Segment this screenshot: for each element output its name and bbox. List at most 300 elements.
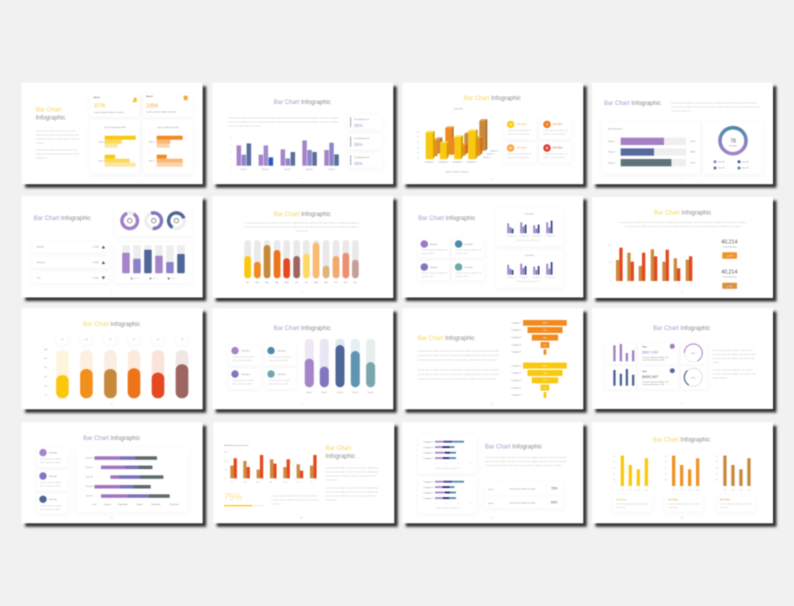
card: item 1: 377K	[94, 104, 106, 110]
slide 10: cards and capsules	[212, 308, 397, 413]
stat card: purple	[638, 343, 678, 365]
card 2	[37, 470, 68, 491]
page number: 8	[681, 291, 683, 294]
card: yellow option: amet consectetur	[507, 133, 530, 136]
gantt chart panel: Task 05	[86, 495, 93, 497]
page number: 7	[492, 291, 494, 293]
chart: brown: Q2	[732, 489, 735, 491]
card 1: Lorem ipsum dolor	[232, 356, 255, 358]
3D column chart: 3	[417, 148, 419, 150]
pill bar chart: Sep	[324, 282, 329, 284]
pill bar chart: Mar	[265, 282, 269, 284]
row: monthly: 12,345	[93, 246, 100, 248]
title: Bar Chart Infographic	[274, 100, 331, 106]
description text: Lorem	[326, 499, 337, 501]
3D column chart	[417, 108, 499, 174]
pill bar chart: Nov	[344, 282, 348, 284]
description text: Lorem ipsum dolor sit amet	[228, 125, 261, 128]
description text: Lorem ipsum dolor sit amet consectetur adipiscing elit sed do	[418, 358, 497, 361]
note text	[272, 495, 319, 505]
page number: 6	[302, 291, 304, 294]
panel: donut 78: Item 04	[742, 167, 750, 170]
stat card: purple: consectetur elit	[642, 358, 665, 362]
chart: bottom: Category 1	[423, 497, 434, 500]
slide 13: gantt	[22, 422, 206, 527]
axis labels: 60	[45, 367, 48, 369]
capsule: orange	[80, 333, 93, 398]
chart: top: Category 2	[423, 451, 434, 454]
stat card: navy: Text	[642, 370, 647, 373]
card 2: sit amet elit	[268, 359, 289, 362]
column chart: May	[283, 481, 287, 483]
card 3	[37, 494, 68, 514]
capsule chart	[305, 339, 375, 394]
card: orange: Lorem	[668, 507, 678, 509]
description text	[245, 222, 360, 232]
capsule: brown: 07	[109, 339, 112, 341]
card 1	[229, 345, 260, 366]
chart: yellow: 50	[613, 467, 616, 469]
pill bar chart: May	[285, 282, 288, 284]
slide 1: costs comparison	[22, 83, 206, 188]
card: orange: Lorem ipsum dolor sit amet	[668, 503, 701, 506]
column chart: 0	[225, 478, 227, 480]
pill bar chart: Jul	[305, 282, 308, 284]
stat: first total: Current Earning	[722, 246, 736, 248]
card 3: sit amet elit	[232, 382, 253, 385]
funnel: yellow: Category 3	[511, 379, 522, 382]
pill bar chart: Feb	[256, 282, 260, 284]
gantt chart panel: Task 03	[86, 476, 93, 478]
capsule chart: Data 2	[321, 391, 328, 394]
page number: 2	[302, 179, 304, 181]
panel: best performers bars: Player 1	[608, 141, 616, 143]
column chart: 100	[224, 469, 228, 471]
chart: bottom	[418, 477, 477, 513]
panel: donut 78: 78	[730, 139, 736, 145]
chart: orange: 30	[664, 473, 668, 475]
chart: top: 4	[458, 463, 460, 465]
chart: brown: 50	[716, 467, 719, 469]
card: yellow option: Text Here	[516, 123, 527, 126]
chart: top	[418, 435, 477, 473]
row: semester: 12,345	[93, 262, 100, 264]
column chart: 4	[230, 152, 232, 154]
description text: Lorem ipsum dolor sit amet consectetur adipiscing elit sed do eiusmod	[418, 369, 499, 372]
description text	[619, 221, 748, 228]
page number: 12	[681, 403, 684, 405]
panel: donut 78	[703, 122, 762, 174]
row: monthly	[32, 241, 108, 252]
ring: 30%: 30%	[691, 377, 696, 379]
stat: second total: 40,214	[721, 270, 737, 276]
funnel: orange: 25%	[543, 345, 547, 347]
card: brown: Text Here	[720, 498, 731, 501]
column chart: 6	[230, 138, 232, 140]
column chart: 100	[608, 262, 612, 264]
chart: top: Series 1 Series 2 Series 3	[516, 240, 540, 242]
card: monthly: Lorem ipsum dolor sit	[421, 248, 448, 252]
column chart	[230, 138, 339, 173]
page number: 4	[681, 179, 683, 181]
row: monthly: Monthly	[37, 246, 44, 248]
funnel: orange: 50%	[543, 337, 547, 339]
panel: donut 78: Item 01	[718, 160, 726, 164]
chart: yellow: 90	[613, 456, 616, 458]
note text: Lorem ipsum dolor sit amet consectetur	[272, 495, 318, 498]
funnel: orange: 75%	[543, 330, 547, 332]
description text: Lorem ipsum dolor sit amet elit	[713, 357, 755, 360]
title: Bar Chart Infographic	[274, 212, 331, 218]
row: semester: Semester	[37, 261, 46, 264]
gantt chart panel: September	[118, 503, 128, 506]
capsule: red: 01	[157, 339, 160, 341]
column chart: 0	[610, 280, 612, 282]
row: year	[32, 272, 108, 283]
card 1: sit amet elit	[232, 359, 253, 362]
description text: Lorem ipsum dolor sit amet consectetur adipiscing	[326, 490, 378, 493]
chart: yellow horizontal bars	[90, 120, 140, 174]
funnel: orange: Category 4	[511, 343, 522, 346]
capsule: dark orange	[128, 333, 140, 398]
panel: donut 78: Item 02	[742, 160, 750, 164]
stat card: navy: $450,097	[642, 375, 658, 379]
axis labels: 80	[45, 358, 48, 360]
funnel: yellow: Category 5	[511, 393, 522, 396]
slide 9: capsule bars	[22, 308, 206, 413]
chart: yellow horizontal bars: Item 2	[99, 160, 105, 163]
title: Bar Chart Infographic	[485, 444, 542, 450]
description text: Lorem ipsum dolor sit amet consectetur adipiscing elit sed do eiusmod	[485, 460, 566, 463]
3D column chart: 6	[417, 132, 419, 134]
data card 1: 55%	[354, 123, 363, 128]
chart: bottom: Category 4	[423, 480, 434, 483]
page number: 14	[300, 516, 303, 519]
title: Bar Chart Infographic	[34, 216, 91, 222]
chart: bottom: Series 1 Series 2 Series 3	[436, 507, 460, 509]
funnel: orange	[511, 320, 567, 355]
column chart: Jun-15	[284, 169, 291, 171]
description text: Lorem ipsum dolor sit amet	[713, 349, 753, 352]
card: item 2	[143, 94, 193, 117]
chart: brown: Q1	[724, 489, 727, 491]
3D column chart: Category 3	[452, 161, 463, 164]
axis labels: 0	[45, 394, 47, 396]
row: item 1: 75%	[551, 487, 558, 491]
title: Bar Chart Infographic	[604, 101, 661, 107]
card: yellow: Lorem	[616, 507, 626, 509]
chart: yellow: Q2	[629, 489, 633, 491]
card 2: Lorem ipsum dolor	[40, 482, 62, 484]
stat: first total: ▲ 40%	[726, 254, 733, 258]
stat card: navy: consectetur elit	[642, 383, 665, 386]
description text: Lorem ipsum dolor sit amet consectetur adipiscing elit sed do eiusmod tempor incididunt ut labore et dolore	[228, 117, 339, 120]
card: red option	[540, 142, 572, 162]
data card 2: Data Analysis 02	[354, 137, 370, 140]
stat card: navy	[638, 366, 678, 389]
panel: column chart with tracks: Item 3	[171, 277, 177, 280]
column chart: Jul	[310, 481, 313, 483]
data card 3	[348, 153, 382, 168]
panel: best performers bars	[602, 122, 700, 174]
axis labels	[44, 349, 48, 396]
chart: bottom: Category 3	[532, 276, 543, 279]
gantt chart panel: November	[151, 504, 161, 506]
column chart	[608, 245, 692, 282]
page number: 16	[681, 516, 684, 519]
column chart: Mar-15	[262, 169, 269, 171]
chart: brown: 10	[716, 479, 719, 481]
page number: 9	[111, 402, 113, 405]
3D column chart: 1	[417, 158, 419, 160]
chart: orange horizontal bars: Item 2	[149, 160, 155, 163]
card 3: sit amet elit	[40, 508, 61, 511]
card: text here teal: amet elit	[455, 252, 468, 255]
ring: 65%: 65%	[691, 353, 696, 355]
title	[326, 446, 355, 460]
description text: Lorem ipsum dolor sit amet consectetur adipiscing elit sed do eiusmod tempor incididunt ut labore	[625, 225, 742, 228]
funnel: orange: Category 2	[511, 328, 522, 331]
card: orange: Text Here	[668, 498, 679, 501]
card 3: Title Here	[49, 498, 58, 501]
card: monthly: Monthly	[430, 243, 437, 246]
gantt chart panel: Task 02	[86, 467, 93, 469]
card 1: Lorem ipsum dolor	[40, 458, 62, 460]
description text: Lorem ipsum dolor sit amet consectetur adipiscing elit sed do eiusmod tempor incididunt ut labore et dolore	[619, 221, 748, 224]
stat card: navy: Lorem ipsum dolor sit	[642, 380, 669, 383]
description text: ut labore et	[36, 157, 48, 160]
row: item 2: Item 2	[488, 502, 495, 505]
gantt chart panel: December	[169, 504, 179, 506]
capsule: mauve: 78	[181, 339, 184, 341]
card 2: Title Here	[277, 349, 287, 352]
card 2: Lorem ipsum dolor	[268, 356, 291, 358]
stat card: purple: Lorem ipsum dolor sit	[642, 356, 669, 359]
card: text here teal: Lorem ipsum dolor sit	[455, 248, 482, 252]
data card 1: Data Analysis 01	[354, 118, 370, 121]
chart: yellow: Q1	[621, 489, 625, 491]
description text	[671, 102, 760, 113]
card 3: Lorem ipsum dolor	[40, 505, 62, 507]
axis labels: 20	[45, 385, 48, 387]
chart: orange: Q1	[672, 489, 676, 491]
description text: Lorem ipsum dolor sit amet consectetur elit	[326, 474, 376, 477]
stat: 75% with progress bar	[224, 492, 264, 506]
column chart: Feb	[244, 481, 248, 483]
card: item 2: 235K	[146, 104, 159, 110]
stat: second total: ▲ 40%	[726, 285, 733, 288]
funnel: yellow: 50%	[543, 380, 547, 382]
column chart: Apr	[270, 480, 273, 483]
card: amber option: Lorem ipsum dolor sit	[507, 153, 532, 156]
description text: Lorem ipsum dolor sit amet consectetur adipiscing elit sed do eiusmod tempor incididunt ut labore	[245, 222, 360, 224]
stat: first total	[721, 240, 737, 259]
chart: top: Category 2	[519, 234, 530, 238]
card: text here pale teal: Lorem ipsum dolor sit	[455, 272, 482, 274]
chart: top: 2	[446, 463, 448, 465]
card: monthly indigo: Lorem ipsum dolor sit	[421, 272, 448, 274]
row: item 1	[484, 482, 563, 496]
page number: 15	[491, 517, 494, 519]
chart: yellow: 10	[613, 479, 616, 481]
gantt chart panel	[76, 447, 188, 512]
capsule chart: Data 4	[352, 391, 359, 394]
card 3: Lorem ipsum dolor	[232, 380, 255, 382]
row: item 1: Item 1	[488, 488, 495, 491]
capsule: brown	[104, 333, 117, 398]
card: red option: amet consectetur	[543, 156, 566, 159]
chart: orange: 10	[664, 479, 668, 481]
3D column chart: 2	[417, 153, 419, 155]
description text	[228, 117, 339, 128]
page number: 11	[491, 402, 494, 405]
description text	[36, 130, 79, 160]
3D column chart: Category 4	[466, 161, 477, 164]
description text: Lorem ipsum dolor sit amet elit	[713, 372, 756, 375]
panel: column chart with tracks: Item 1	[134, 277, 140, 280]
3D column chart: Category 1	[424, 161, 435, 164]
card 4: sit amet elit	[268, 382, 289, 385]
description text	[713, 349, 756, 379]
chart: top: 0	[435, 463, 437, 465]
card: item 1	[90, 94, 140, 117]
description text: elit	[713, 361, 720, 364]
chart: orange	[664, 456, 700, 491]
mini chart: purple	[606, 343, 635, 365]
chart: bottom: 0	[435, 503, 437, 505]
slide 15: stacked horizontal bars	[402, 422, 587, 527]
description text	[485, 456, 566, 467]
pill bar chart: Dec	[354, 282, 357, 284]
ring: 30%	[681, 365, 707, 390]
card 2	[265, 345, 296, 366]
chart: top: Category 4	[423, 440, 434, 443]
description text	[418, 349, 499, 380]
chart: yellow horizontal bars: Costs Comparison 2018	[104, 126, 126, 129]
chart: yellow horizontal bars: Item 1	[99, 141, 105, 144]
chart: yellow: Q4	[645, 489, 649, 491]
description text: adipiscing elit sed do eiusmod tempor incid	[36, 134, 79, 137]
3D column chart: Series 1 Series 2 Series 3	[446, 172, 470, 174]
title: Bar Chart Infographic	[83, 436, 140, 442]
description text: Lorem ipsum dolor sit amet consectetur adipiscing	[326, 486, 378, 489]
slide 7: two charts with cards	[402, 196, 587, 301]
row: item 2: 64%	[551, 501, 558, 505]
card 4: Title Here	[277, 373, 287, 376]
description text: Lorem ipsum dolor sit amet consectetur adipiscing elit sed do eiusmod tempor	[671, 106, 760, 109]
chart: brown	[716, 456, 751, 491]
data card 3: Data Analysis 03	[354, 156, 370, 159]
slide 4: best performers	[592, 83, 776, 188]
capsule: dark orange: 07	[133, 339, 136, 341]
panel: best performers bars: 2,150	[690, 141, 696, 143]
description text: Lorem ipsum dolor sit amet consectetur adipiscing	[326, 470, 378, 473]
ring: 65%	[681, 343, 707, 365]
3D column chart: Chart Title	[454, 108, 464, 111]
chart: bottom: Chart Title	[525, 254, 535, 257]
card: monthly indigo: Monthly	[430, 266, 437, 269]
title: Bar Chart	[326, 446, 352, 452]
data card 2	[348, 134, 382, 149]
chart: top: Category 1	[423, 457, 434, 460]
card: monthly indigo: amet elit	[421, 275, 434, 278]
description text: Lorem ipsum dolor sit amet consectetur	[36, 130, 76, 133]
title: Infographic	[326, 454, 355, 460]
card: red option: Lorem ipsum dolor sit	[543, 153, 568, 156]
column chart: 200	[608, 245, 612, 247]
title: Bar Chart Infographic	[418, 216, 475, 222]
card: orange	[665, 496, 703, 512]
chart: yellow: 70	[613, 461, 616, 463]
chart: orange: 90	[664, 456, 668, 458]
row: year: Year	[37, 278, 41, 280]
chart: orange horizontal bars: Item 1	[149, 141, 155, 144]
page number: 1	[111, 179, 113, 181]
chart: brown: 70	[716, 461, 719, 463]
description text: Lorem ipsum dolor sit amet consectetur	[36, 149, 78, 152]
card: amber option	[504, 142, 536, 162]
description text: ut labore et dolore magna aliqua enim ad	[36, 138, 79, 141]
page number: 3	[492, 178, 494, 181]
pill bar chart: Jun	[295, 282, 298, 284]
card: text here pale teal: Text Here	[464, 266, 474, 269]
description text: Lorem ipsum dolor sit amet consectetur adipiscing elit sed do	[418, 377, 497, 380]
row: item 1: Lorem ipsum dolor sit amet	[509, 487, 536, 490]
card: brown	[717, 496, 755, 512]
column chart: 150	[224, 460, 228, 462]
note text: Lorem	[272, 503, 281, 505]
card: item 2: Item 2	[146, 95, 153, 98]
panel: best performers bars: Best Performers	[608, 128, 622, 131]
card: yellow: Lorem ipsum dolor sit amet	[616, 503, 649, 506]
chart heading: Monthly Earnings Overview	[224, 444, 249, 447]
gantt chart panel: Task 01	[86, 457, 93, 459]
description text: Lorem ipsum dolor sit amet elit	[713, 353, 756, 356]
column chart	[224, 452, 317, 483]
capsule chart: Data 1	[306, 391, 313, 394]
description text: Lorem ipsum dolor sit amet consectetur adipiscing elit sed do eiusmod	[418, 373, 499, 376]
column chart: Jan-16	[328, 169, 335, 171]
slide 11: funnels	[402, 308, 587, 413]
3D column chart: Series 3	[491, 151, 499, 153]
title: Bar Chart Infographic	[653, 326, 710, 332]
panel: donut 78: Text Here	[729, 145, 738, 148]
stat card: purple: Text	[642, 346, 647, 348]
description text: minim	[36, 143, 44, 145]
slide 6: twelve month pill bars	[212, 196, 397, 302]
funnel: yellow	[511, 363, 567, 398]
funnel: yellow: 25%	[543, 387, 547, 389]
card: item 1: Lorem ipsum dolor sit amet	[94, 111, 124, 114]
chart: brown: 30	[716, 473, 719, 475]
gantt chart panel: Date	[92, 503, 97, 506]
data card 3: 55%	[354, 161, 363, 166]
row: semester	[32, 257, 108, 268]
chart: top	[496, 208, 563, 246]
panel: column chart with tracks: Item 2	[153, 277, 159, 280]
chart: brown: Q3	[740, 489, 743, 491]
description text: Lorem ipsum dolor sit amet consectetur adipiscing	[326, 466, 378, 469]
card: item 2: Lorem ipsum dolor sit amet	[146, 111, 177, 114]
card: text here teal	[452, 238, 484, 258]
row: year: 12,345	[93, 278, 100, 280]
title: Bar Chart Infographic	[83, 322, 140, 328]
funnel: yellow: Category 1	[511, 364, 522, 367]
chart: top: Series 1 Series 2 Series 3	[436, 468, 460, 470]
card: monthly	[418, 238, 450, 258]
slide 16: three column charts	[592, 422, 776, 527]
capsule: yellow: 01	[61, 339, 64, 341]
